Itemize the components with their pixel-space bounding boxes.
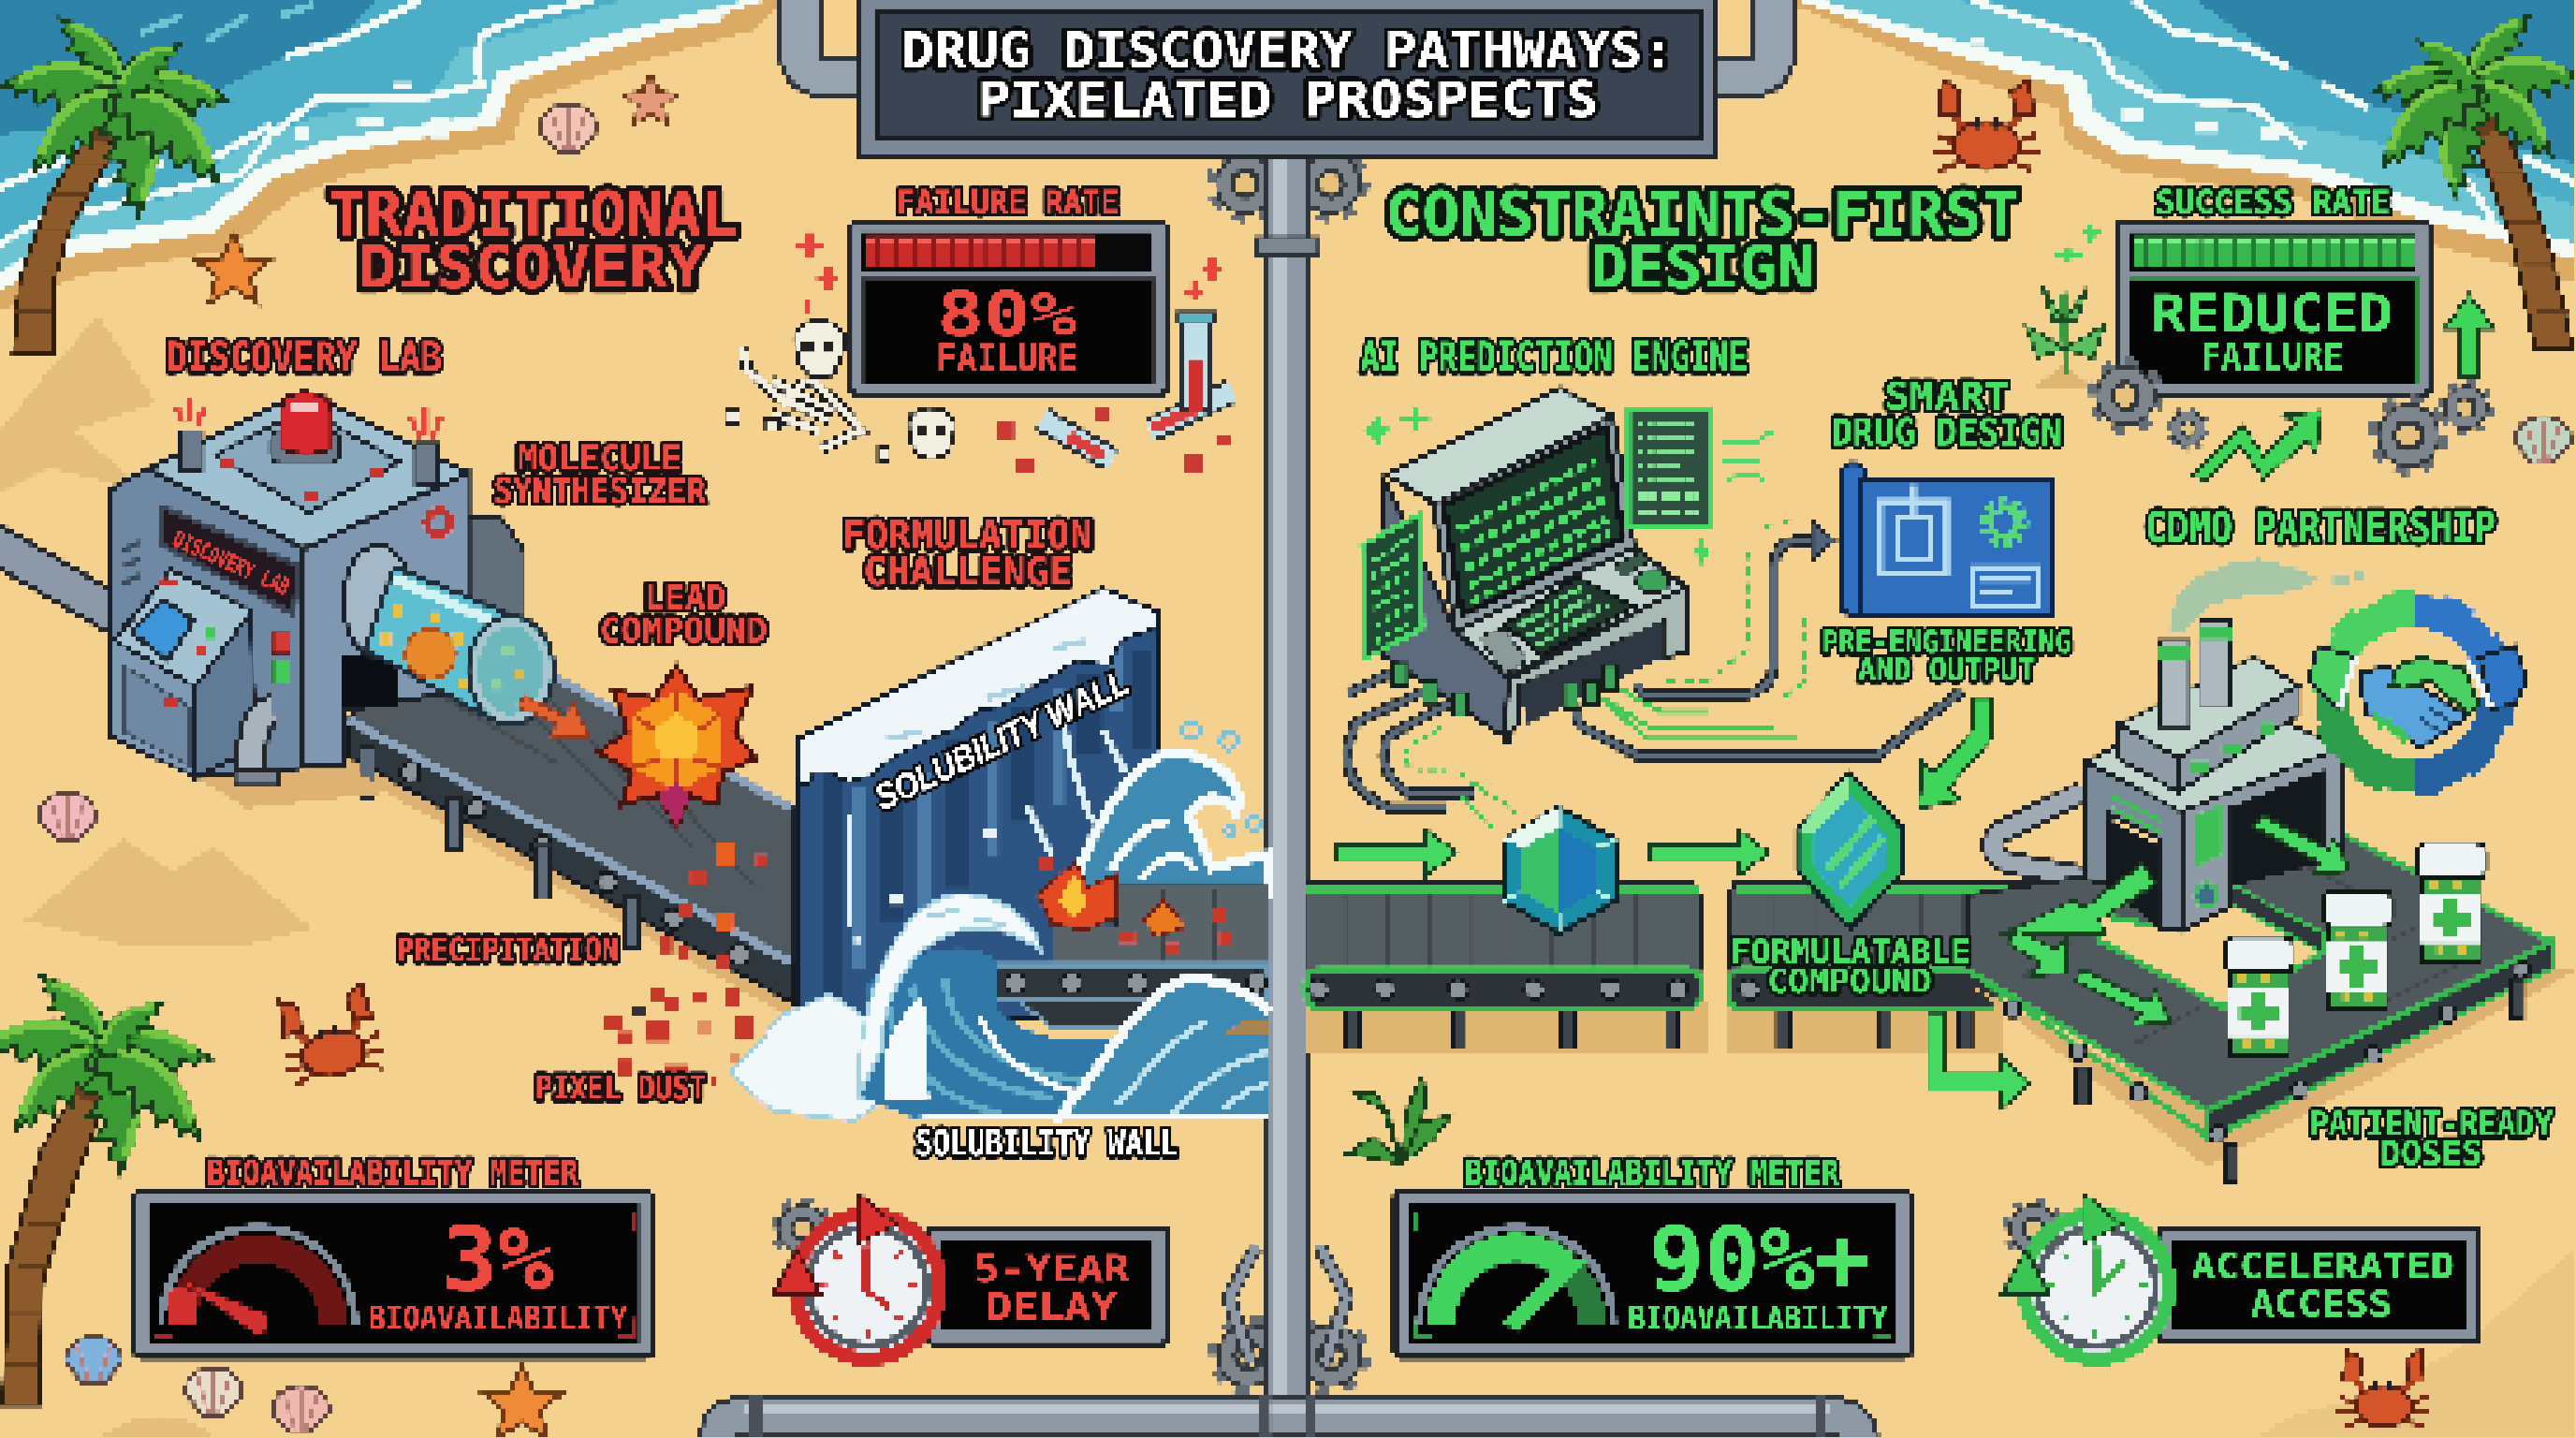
discovery lab machine xyxy=(110,391,553,785)
bottle one xyxy=(2224,936,2293,1055)
left meter label: BIOAVAILABILITY METER xyxy=(207,1152,578,1193)
five-year delay text: 5-YEAR xyxy=(973,1247,1130,1291)
left meter readout xyxy=(368,1209,627,1338)
small plant xyxy=(1347,1075,1453,1164)
gauge left xyxy=(161,1227,355,1334)
belt green arrows xyxy=(2001,815,2349,1025)
label: ai prediction engine: AI PREDICTION ENGINE xyxy=(1360,334,1748,382)
label: cdmo partnership: CDMO PARTNERSHIP xyxy=(2144,503,2496,552)
title text xyxy=(902,22,1674,129)
label: lead compound: COMPOUND xyxy=(600,610,768,651)
back wave xyxy=(1076,753,1268,896)
clock icon red xyxy=(774,1193,940,1358)
heading: traditional discovery: TRADITIONAL xyxy=(328,180,739,250)
blueprint xyxy=(1841,463,2052,614)
handshake xyxy=(2359,666,2467,748)
factory smoke xyxy=(2169,559,2320,633)
label: smart drug design: SMART xyxy=(1884,374,2009,418)
cuffs xyxy=(2308,646,2356,708)
label: smart drug design: DRUG DESIGN xyxy=(1832,411,2062,455)
success rate panel xyxy=(2117,222,2430,394)
failure rate label: FAILURE RATE xyxy=(897,183,1119,222)
label: pixel dust: PIXEL DUST xyxy=(535,1069,707,1108)
palm tree top left xyxy=(0,1,242,355)
green flow arrows xyxy=(1338,829,1769,875)
lab ground shadow xyxy=(196,768,394,809)
label: discovery lab: DISCOVERY LAB xyxy=(166,334,442,382)
palm tree top right xyxy=(2361,0,2576,348)
title text: PIXELATED PROSPECTS xyxy=(977,72,1599,129)
label: formulatable compound: FORMULATABLE xyxy=(1731,932,1970,971)
up arrow xyxy=(2445,294,2494,376)
belt one xyxy=(1306,884,1701,1009)
label: patient-ready doses: DOSES xyxy=(2380,1133,2482,1173)
heading: constraints-first design: CONSTRAINTS-FIRST xyxy=(1385,180,2019,250)
five-year delay text: DELAY xyxy=(986,1284,1118,1328)
heading: traditional discovery xyxy=(328,180,739,301)
label: formulation challenge: CHALLENGE xyxy=(863,549,1072,594)
right holo panel xyxy=(1628,409,1710,527)
accelerated access text: ACCESS xyxy=(2250,1284,2392,1326)
label: lead compound xyxy=(600,578,768,651)
left wave xyxy=(862,948,1160,1121)
failure percent readout xyxy=(936,280,1077,381)
title panel xyxy=(859,0,1717,156)
wall sign text: SOLUBILITY WALL xyxy=(869,663,1135,818)
heading: traditional discovery: DISCOVERY xyxy=(359,232,707,301)
crashing waves xyxy=(729,721,1268,1121)
label: formulatable compound xyxy=(1731,932,1970,1001)
failure percent readout: 80% xyxy=(937,280,1076,350)
computer screen xyxy=(1444,427,1623,614)
accelerated access text: ACCELERATED xyxy=(2191,1245,2454,1287)
green down arrow xyxy=(1919,698,1991,809)
reduced failure readout: FAILURE xyxy=(2201,335,2344,379)
five-year delay text xyxy=(973,1247,1130,1328)
left conveyor belt xyxy=(348,642,792,1019)
belt two xyxy=(1728,884,2070,1009)
label: patient-ready doses xyxy=(2310,1104,2554,1173)
label: patient-ready doses: PATIENT-READY xyxy=(2310,1104,2554,1144)
label: formulation challenge xyxy=(842,512,1092,594)
right conveyors xyxy=(1306,884,2070,1055)
gem: blue-green crystal xyxy=(1503,807,1617,933)
keyboard xyxy=(1479,552,1669,674)
lab sign plate xyxy=(159,506,298,614)
heading: constraints-first design xyxy=(1385,180,2019,301)
precipitation debris xyxy=(605,842,768,1084)
right ocean xyxy=(1782,0,2576,283)
sprout icon xyxy=(2026,217,2108,388)
burst crystal fragments xyxy=(1038,858,1232,953)
heading: constraints-first design: DESIGN xyxy=(1590,232,1814,301)
elbow green arrow xyxy=(1928,1012,2030,1109)
bottom pipes xyxy=(720,1397,1860,1438)
reduced failure readout: REDUCED xyxy=(2151,285,2393,345)
right wave xyxy=(1055,977,1268,1121)
label: pre-engineering and output: PRE-ENGINEERING xyxy=(1822,624,2071,660)
bioavailability meter panel left xyxy=(135,1191,652,1357)
title text: DRUG DISCOVERY PATHWAYS: xyxy=(902,22,1674,80)
label: smart drug design xyxy=(1832,374,2062,455)
label: molecule synthesizer xyxy=(493,438,707,511)
isometric output conveyor xyxy=(1967,800,2576,1183)
label: pre-engineering and output: AND OUTPUT xyxy=(1858,652,2036,688)
label: formulatable compound: COMPOUND xyxy=(1767,962,1932,1001)
wires from computer xyxy=(1347,431,1963,829)
sand dunes xyxy=(0,315,2576,1438)
palm tree bottom left xyxy=(0,959,224,1405)
skeleton and broken test tubes xyxy=(726,231,1232,473)
accelerated access timer panel xyxy=(2002,1193,2479,1358)
bottle two xyxy=(2323,890,2392,1009)
gauge right xyxy=(1419,1227,1614,1331)
top feeder pipes xyxy=(800,0,1775,77)
clock icon green xyxy=(2002,1193,2169,1358)
medicine bottles xyxy=(2224,843,2485,1055)
lab sign text: DISCOVERY LAB xyxy=(169,525,294,601)
gem: green formulated crystal xyxy=(1797,772,1904,929)
accelerated access text xyxy=(2191,1245,2454,1326)
control console xyxy=(110,570,255,777)
factory building xyxy=(2086,559,2365,932)
glass reactor tube xyxy=(344,546,553,725)
red output arrow xyxy=(518,695,590,738)
bottle three xyxy=(2417,843,2485,961)
success rate label: SUCCESS RATE xyxy=(2156,183,2391,222)
trend arrow xyxy=(2191,411,2321,479)
right meter label: BIOAVAILABILITY METER xyxy=(1465,1152,1840,1193)
ai computer xyxy=(1355,388,1719,740)
label: molecule synthesizer: SYNTHESIZER xyxy=(493,471,707,511)
left meter readout: BIOAVAILABILITY xyxy=(368,1299,627,1338)
five-year delay timer panel xyxy=(774,1193,1166,1358)
right meter readout xyxy=(1628,1209,1888,1338)
label: pre-engineering and output xyxy=(1822,624,2071,688)
right meter readout: BIOAVAILABILITY xyxy=(1628,1299,1888,1338)
foam pile xyxy=(729,994,896,1121)
belt behind wave xyxy=(996,884,1268,1027)
left holo panel xyxy=(1362,514,1423,659)
cdmo partnership gear handshake xyxy=(2308,601,2526,785)
label: lead compound: LEAD xyxy=(644,578,726,618)
failure percent readout: FAILURE xyxy=(936,337,1077,381)
label: precipitation: PRECIPITATION xyxy=(397,932,619,970)
left ocean xyxy=(0,0,785,312)
bioavailability meter panel right xyxy=(1395,1191,1910,1357)
label: formulation challenge: FORMULATION xyxy=(842,512,1092,558)
reduced failure readout xyxy=(2151,285,2393,379)
label: solubility wall: SOLUBILITY WALL xyxy=(915,1123,1178,1165)
label: molecule synthesizer: MOLECULE xyxy=(518,438,681,478)
factory feed pipe xyxy=(1993,792,2083,877)
left meter readout: 3% xyxy=(442,1209,553,1312)
left feed pipe xyxy=(0,542,118,616)
solubility wall xyxy=(797,588,1160,1019)
success gears and growth arrows xyxy=(2093,294,2494,479)
right meter readout: 90%+ xyxy=(1648,1209,1870,1312)
failure rate panel xyxy=(851,222,1166,394)
central divider pipe xyxy=(1213,152,1365,1438)
lead compound crystal xyxy=(598,666,755,827)
